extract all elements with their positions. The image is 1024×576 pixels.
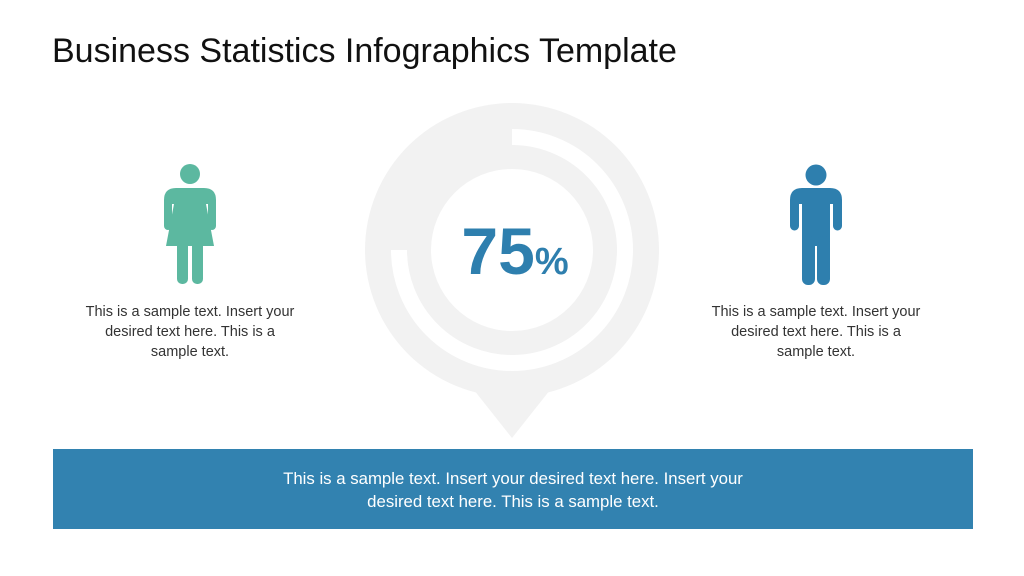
icon: female bbox=[164, 164, 216, 284]
text: female description: This is a sample text. Insert your bbox=[86, 304, 294, 320]
text: male description: desired text here. This is a bbox=[731, 324, 901, 340]
icon: male bbox=[790, 164, 842, 285]
bottom banner: desired text here. This is a sample text. bbox=[367, 492, 659, 511]
progress ring 75% bbox=[399, 137, 625, 363]
text: female description bbox=[86, 304, 294, 360]
inner circle bbox=[431, 169, 593, 331]
percentage value: 75% bbox=[461, 214, 569, 288]
title: Business Statistics Infographics Template bbox=[52, 32, 677, 70]
bottom banner bbox=[53, 449, 973, 529]
text: male description: sample text. bbox=[777, 344, 855, 360]
text: female description: desired text here. This is a bbox=[105, 324, 275, 340]
text: female description: sample text. bbox=[151, 344, 229, 360]
pin shape bbox=[365, 103, 659, 438]
text: male description: This is a sample text. Insert your bbox=[712, 304, 920, 320]
bottom banner: This is a sample text. Insert your desired text here. Insert your bbox=[283, 469, 743, 488]
text: male description bbox=[712, 304, 920, 360]
